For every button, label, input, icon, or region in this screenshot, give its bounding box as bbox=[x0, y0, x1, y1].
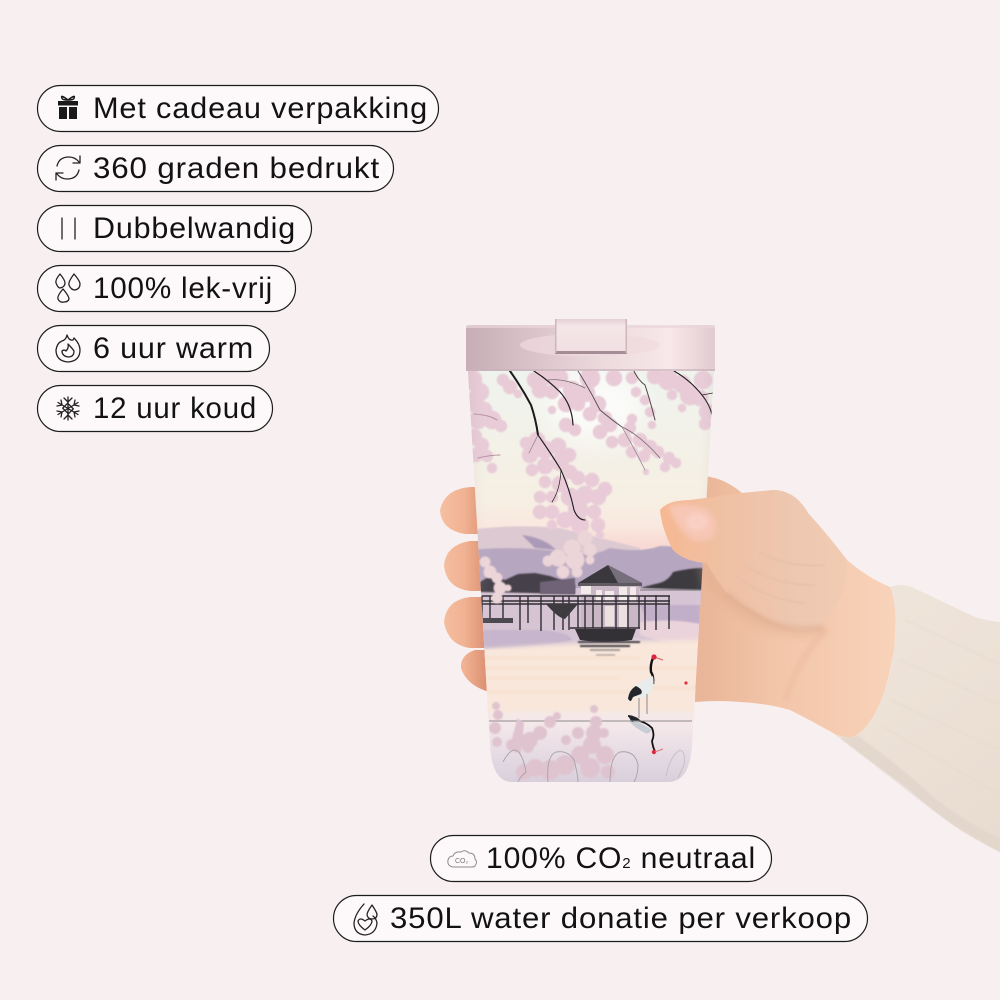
sweater sleeve bbox=[833, 585, 1000, 852]
badge: 6 uur warm: 6 uur warm bbox=[93, 332, 254, 365]
icon: CO2 cloud: CO₂ bbox=[455, 858, 468, 865]
badge: 350L water donatie per verkoop: 350L water donatie per verkoop bbox=[390, 902, 852, 935]
cherry blossoms upper bbox=[463, 368, 714, 538]
badge: Met cadeau verpakking: Met cadeau verpakking bbox=[93, 92, 428, 125]
lake water bbox=[480, 588, 701, 712]
blossom reflections bbox=[490, 703, 614, 779]
badge: 350L water donatie per verkoop bbox=[334, 896, 868, 942]
icon: double wall bbox=[62, 218, 75, 239]
badge: 360 graden bedrukt: 360 graden bedrukt bbox=[93, 152, 380, 185]
icon: snowflake bbox=[57, 397, 79, 420]
lid bbox=[466, 319, 715, 371]
icon: CO2 cloud bbox=[448, 851, 476, 867]
waterline bbox=[489, 720, 692, 722]
badge: Met cadeau verpakking bbox=[38, 86, 438, 132]
tree lines bbox=[480, 568, 703, 594]
badge: 100% lek-vrij: 100% lek-vrij bbox=[93, 272, 273, 305]
cup body with printed scene bbox=[460, 368, 720, 786]
badge: 360 graden bedrukt bbox=[38, 146, 394, 192]
lid sliding tab bbox=[555, 319, 627, 354]
badge: Dubbelwandig: Dubbelwandig bbox=[93, 212, 296, 245]
distant mountains bbox=[470, 526, 710, 600]
icon: gift bbox=[58, 96, 78, 119]
thumbnail bbox=[669, 505, 716, 541]
travel cup bbox=[460, 319, 720, 786]
cherry blossoms lower centre bbox=[481, 532, 595, 602]
pavilion and pier bbox=[482, 565, 670, 655]
badge: 100% lek-vrij bbox=[38, 266, 296, 312]
badge: Dubbelwandig bbox=[38, 206, 312, 252]
badge: 6 uur warm bbox=[38, 326, 270, 372]
black branches bbox=[474, 371, 713, 520]
badge: 12 uur koud: 12 uur koud bbox=[93, 392, 257, 425]
crane and its reflection bbox=[628, 654, 688, 754]
fingers behind the cup bbox=[440, 487, 495, 691]
icon: water drop with heart bbox=[354, 904, 377, 935]
hand palm and wrist bbox=[695, 476, 895, 737]
badge: 100% CO2 neutraal bbox=[430, 836, 772, 882]
badge: 100% CO2 neutraal: 100% CO2 neutraal bbox=[486, 842, 756, 875]
thumb with nail bbox=[660, 490, 847, 632]
bottom arcs bbox=[503, 750, 684, 782]
badge: 12 uur koud bbox=[38, 386, 272, 432]
icon: water drops bbox=[56, 274, 80, 302]
icon: rotate arrows bbox=[56, 156, 80, 180]
icon: flame bbox=[56, 335, 80, 362]
